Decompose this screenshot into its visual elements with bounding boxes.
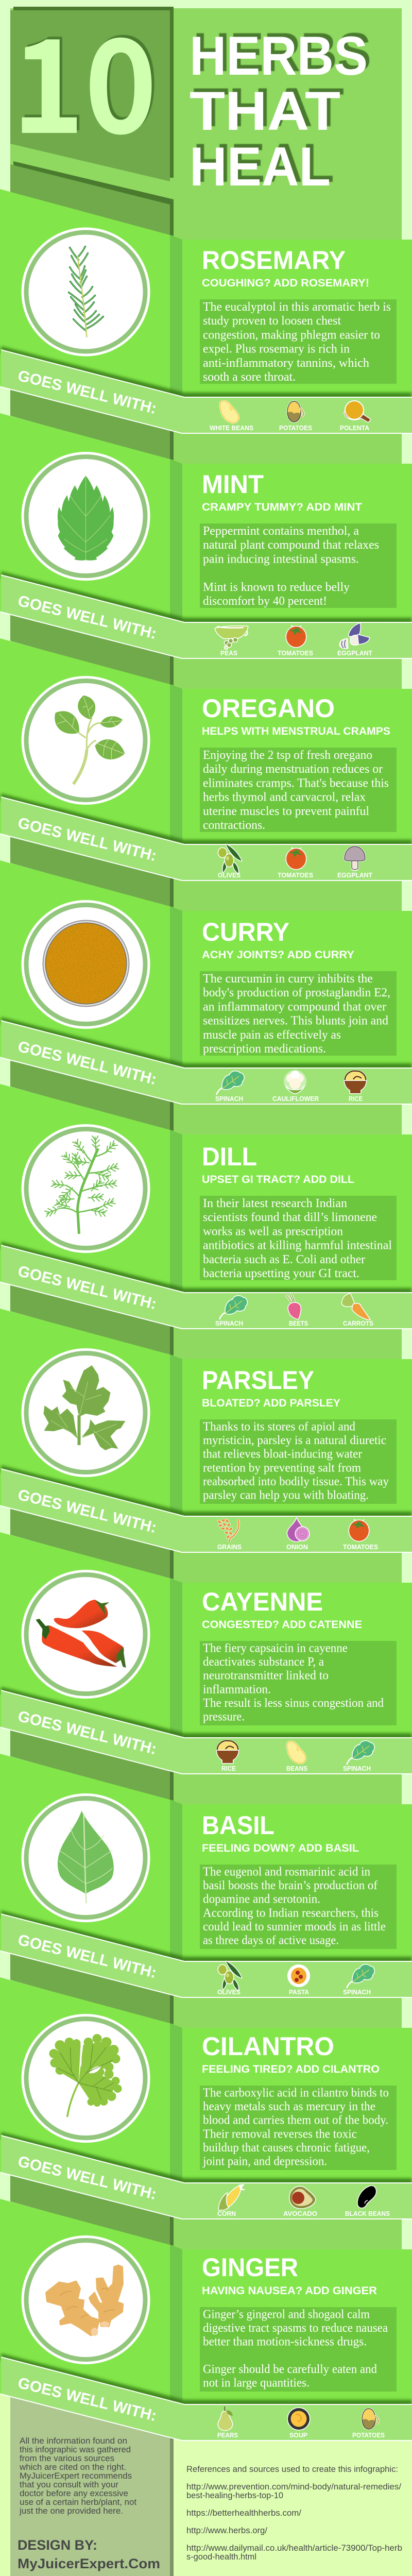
- text block: The curcumin in curry inhibits the: [203, 972, 373, 986]
- panel: cilantro: [0, 1977, 412, 2249]
- food: eggplant: [337, 623, 372, 657]
- food: spinach: SPINACH: [343, 1988, 371, 1996]
- text block: discomfort by 40 percent!: [203, 595, 327, 608]
- text block: not in large quantities.: [203, 2376, 310, 2389]
- food: rice: RICE: [221, 1765, 236, 1772]
- food: carrots: [342, 1294, 373, 1327]
- heading: curry: CURRY: [202, 918, 289, 946]
- text block: study proven to loosen chest: [203, 314, 341, 328]
- text block: parsley can help you with bloating.: [203, 1489, 369, 1502]
- food: spinach: SPINACH: [215, 1095, 243, 1103]
- text block: Enjoying the 2 tsp of fresh oregano: [203, 749, 372, 762]
- ribbon label: GOES WELL WITH:: [16, 592, 158, 642]
- ribbon: [1, 346, 412, 433]
- food: tomatoes: [278, 848, 313, 879]
- text block: Peppermint contains menthol, a: [203, 524, 359, 538]
- food: olives: [218, 844, 242, 879]
- text block: as three days of active usage.: [203, 1934, 339, 1947]
- references: http://www.prevention.com/mind-body/natural-remedies/: [186, 2482, 401, 2492]
- text block: contractions.: [203, 819, 265, 832]
- food: avocado: AVOCADO: [283, 2210, 317, 2217]
- ribbon label: GOES WELL WITH:: [16, 2153, 158, 2203]
- disclaimer text: All the information found on: [20, 2436, 127, 2446]
- disclaimer text: just the one provided here.: [19, 2506, 123, 2516]
- subheading: FEELING TIRED? ADD CILANTRO: [202, 2063, 380, 2075]
- text block: bacteria such as E. Coli and other: [203, 1253, 365, 1266]
- heading: basil: BASIL: [202, 1811, 274, 1840]
- text block: that relieves bloat-inducing water: [203, 1448, 362, 1461]
- text block: [200, 748, 397, 832]
- panel: basil: [0, 1754, 412, 2028]
- ribbon: [1, 793, 412, 880]
- food: avocado: [283, 2187, 317, 2217]
- text block: According to Indian researchers, this: [203, 1906, 379, 1920]
- text block: [200, 1196, 397, 1280]
- food: spinach: [343, 1965, 374, 1996]
- references: http://www.herbs.org/: [186, 2526, 267, 2535]
- circle illustration: mint: [22, 452, 150, 581]
- disclaimer text: that you consult with your: [20, 2480, 118, 2489]
- ribbon label: GOES WELL WITH:: [16, 1263, 158, 1313]
- title: herbs that heal: HERBS: [190, 25, 368, 87]
- disclaimer text: which are cited on the right.: [19, 2462, 126, 2472]
- food: polenta: POLENTA: [340, 424, 370, 432]
- food: eggplant: EGGPLANT: [337, 649, 372, 657]
- references: best-healing-herbs-top-10: [186, 2490, 283, 2500]
- circle illustration: parsley: [22, 1348, 150, 1477]
- ribbon label: GOES WELL WITH:: [16, 1931, 158, 1981]
- design credit: MyJuicerExpert.Com: [18, 2556, 160, 2571]
- text block: The fiery capsaicin in cayenne: [203, 1641, 348, 1655]
- food: black beans: [345, 2186, 390, 2217]
- text block: could lead to sunnier moods in as little: [203, 1920, 386, 1934]
- food: rice: [345, 1071, 366, 1103]
- food: spinach: SPINACH: [343, 1765, 371, 1772]
- food: grains: GRAINS: [217, 1543, 242, 1551]
- text block: buildup that causes chronic fatigue,: [203, 2141, 370, 2155]
- food: beans: BEANS: [286, 1765, 307, 1772]
- text block: pain inducing intestinal spasms.: [203, 552, 359, 566]
- heading: rosemary: ROSEMARY: [202, 246, 346, 275]
- disclaimer text: doctor before any excessive: [20, 2488, 128, 2498]
- disclaimer text: this infographic was gathered: [20, 2445, 131, 2454]
- text block: [200, 1641, 397, 1725]
- title: herbs that heal: HERBS: [193, 21, 371, 83]
- subheading: HAVING NAUSEA? ADD GINGER: [202, 2285, 377, 2297]
- references: [186, 2464, 402, 2562]
- text block: neurotransmitter linked to: [203, 1669, 329, 1683]
- references: s-good-health.html: [186, 2552, 256, 2562]
- text block: scientists found that dill’s limonene: [203, 1211, 377, 1224]
- subheading: CONGESTED? ADD CATENNE: [202, 1619, 362, 1631]
- food: black beans: BLACK BEANS: [345, 2210, 390, 2217]
- food: spinach: [343, 1741, 374, 1772]
- ribbon label: GOES WELL WITH:: [16, 815, 158, 865]
- food: olives: OLIVES: [218, 871, 241, 879]
- food: pears: [217, 2406, 238, 2439]
- text block: myristicin, parsley is a natural diuretic: [203, 1434, 386, 1447]
- heading: ginger: GINGER: [202, 2253, 298, 2282]
- food: grains: [217, 1518, 242, 1551]
- circle illustration: curry: [22, 900, 150, 1029]
- text block: antibiotics at killing harmful intestinal: [203, 1239, 392, 1252]
- subheading: HELPS WITH MENSTRUAL CRAMPS: [202, 725, 390, 737]
- text block: [200, 2086, 397, 2170]
- design credit: DESIGN BY:: [18, 2537, 97, 2553]
- circle illustration: basil: [22, 1793, 150, 1922]
- panel: cayenne: [0, 1532, 412, 1804]
- food: pasta: [287, 1964, 310, 1996]
- text block: eliminates cramps. That's because this: [203, 776, 389, 790]
- panel: rosemary: [0, 189, 412, 464]
- heading: oregano: OREGANO: [202, 694, 335, 723]
- food: spinach: [215, 1296, 247, 1327]
- food: olives: [217, 1961, 242, 1996]
- references: http://www.dailymail.co.uk/health/article-73900/Top-herb: [186, 2543, 402, 2553]
- text block: Ginger should be carefully eaten and: [203, 2363, 377, 2376]
- food: spinach: [215, 1072, 244, 1103]
- heading: dill: DILL: [202, 1142, 257, 1171]
- title: herbs that heal: HEAL: [193, 132, 334, 194]
- text block: [200, 1419, 397, 1504]
- food: beets: [286, 1294, 308, 1327]
- text block: Ginger’s gingerol and shogaol calm: [203, 2308, 370, 2321]
- subheading: BLOATED? ADD PARSLEY: [202, 1397, 340, 1409]
- heading: cilantro: CILANTRO: [202, 2032, 334, 2061]
- title: herbs that heal: THAT: [193, 76, 344, 138]
- design credit: [18, 2537, 160, 2571]
- ribbon label: GOES WELL WITH:: [16, 1038, 158, 1088]
- text block: [200, 299, 397, 384]
- heading: mint: MINT: [202, 470, 264, 499]
- subheading: COUGHING? ADD ROSEMARY!: [202, 277, 369, 289]
- ribbon: [1, 2353, 412, 2441]
- food: onion: ONION: [286, 1543, 308, 1551]
- text block: bacteria upsetting your GI tract.: [203, 1267, 359, 1280]
- panel: parsley: [0, 1309, 412, 1583]
- text block: [200, 523, 397, 608]
- food: tomatoes: [278, 625, 313, 657]
- ribbon label: GOES WELL WITH:: [16, 367, 158, 417]
- title: herbs that heal: [190, 21, 371, 197]
- food: tomatoes: TOMATOES: [343, 1543, 378, 1551]
- text block: expel. Plus rosemary is rich in: [203, 343, 350, 356]
- food: cauliflower: [272, 1070, 319, 1103]
- food: beets: BEETS: [289, 1319, 308, 1327]
- text block: dopamine and serotonin.: [203, 1893, 320, 1906]
- text block: The carboxylic acid in cilantro binds to: [203, 2087, 389, 2100]
- text block: The eugenol and rosmarinic acid in: [203, 1865, 370, 1878]
- ribbon: [1, 2132, 412, 2219]
- food: peas: PEAS: [220, 649, 237, 657]
- text block: [200, 971, 397, 1056]
- food: soup: [288, 2408, 310, 2439]
- ribbon: [1, 1465, 412, 1552]
- subheading: CRAMPY TUMMY? ADD MINT: [202, 501, 362, 513]
- text block: sensitizes nerves. This blunts join and: [203, 1014, 388, 1028]
- food: corn: CORN: [217, 2210, 236, 2217]
- circle illustration: oregano: [22, 676, 150, 805]
- panel: mint: [0, 413, 412, 689]
- subheading: UPSET GI TRACT? ADD DILL: [202, 1174, 354, 1185]
- text block: reabsorbed into bodily tissue. This way: [203, 1475, 389, 1488]
- food: tomatoes: [343, 1519, 378, 1551]
- circle illustration: dill: [22, 1124, 150, 1253]
- food: tomatoes: TOMATOES: [278, 649, 313, 657]
- text block: pressure.: [203, 1710, 245, 1724]
- ribbon: [1, 1017, 412, 1104]
- heading: parsley: PARSLEY: [202, 1366, 314, 1395]
- text block: anti-inflammatory tannins, which: [203, 357, 369, 370]
- text block: The result is less sinus congestion and: [203, 1697, 384, 1710]
- heading: cayenne: CAYENNE: [202, 1587, 323, 1616]
- ribbon label: GOES WELL WITH:: [16, 1486, 158, 1536]
- text block: [200, 1865, 397, 1949]
- text block: digestive tract spasms to reduce nausea: [203, 2321, 388, 2335]
- header panel: [10, 0, 402, 240]
- text block: basil boosts the brain’s production of: [203, 1879, 377, 1892]
- text block: muscle pain as effectively as: [203, 1028, 341, 1042]
- food: potatoes: [279, 401, 312, 432]
- food: peas: [215, 626, 248, 657]
- panel: oregano: [0, 638, 412, 911]
- text block: Mint is known to reduce belly: [203, 581, 350, 594]
- food: eggplant (mushroom icon): [337, 846, 372, 879]
- panel: ginger: [0, 2199, 412, 2441]
- food: beans: [286, 1741, 307, 1772]
- circle illustration: cilantro: [22, 2014, 150, 2143]
- references: https://betterhealthherbs.com/: [186, 2508, 301, 2518]
- food: olives: OLIVES: [217, 1988, 241, 1996]
- ribbon label: GOES WELL WITH:: [16, 1708, 158, 1758]
- disclaimer text: use of a certain herb/plant, not: [20, 2497, 136, 2507]
- text block: body's production of prostaglandin E2,: [203, 986, 390, 999]
- disclaimer text: [19, 2436, 136, 2516]
- text block: blood and carries them out of the body.: [203, 2114, 388, 2127]
- text block: deactivates substance P, a: [203, 1655, 324, 1669]
- food: white beans: WHITE BEANS: [210, 424, 253, 432]
- text block: an inflammatory compound that over: [203, 1000, 386, 1013]
- disclaimer text: from the various sources: [20, 2453, 114, 2463]
- food: corn: [217, 2184, 246, 2217]
- text block: [200, 2307, 397, 2392]
- food: tomatoes: TOMATOES: [278, 871, 313, 879]
- text block: prescription medications.: [203, 1042, 326, 1056]
- text block: herbs thymol and carvacrol, relax: [203, 791, 366, 804]
- food: pasta: PASTA: [289, 1988, 310, 1996]
- text block: joint pain, and depression.: [202, 2155, 327, 2168]
- food: potatoes: [352, 2409, 385, 2439]
- food: spinach: SPINACH: [215, 1319, 243, 1327]
- title: herbs that heal: HEAL: [190, 135, 331, 197]
- circle illustration: rosemary: [22, 228, 150, 357]
- text block: better than motion-sickness drugs.: [203, 2335, 367, 2349]
- text block: Their removal reverses the toxic: [203, 2127, 357, 2141]
- ribbon: [1, 1687, 412, 1774]
- panel: curry: [0, 860, 412, 1134]
- subheading: FEELING DOWN? ADD BASIL: [202, 1842, 359, 1854]
- subheading: ACHY JOINTS? ADD CURRY: [202, 949, 354, 961]
- text block: In their latest research Indian: [203, 1197, 347, 1210]
- text block: congestion, making phlegm easier to: [203, 328, 380, 342]
- circle illustration: ginger: [22, 2235, 150, 2364]
- text block: Thanks to its stores of apiol and: [203, 1420, 355, 1433]
- ribbon: [1, 1910, 412, 1997]
- ribbon: [1, 1242, 412, 1329]
- food: white beans: [210, 401, 253, 432]
- food: potatoes: POTATOES: [352, 2431, 385, 2439]
- food: carrots: CARROTS: [343, 1319, 373, 1327]
- title: herbs that heal: THAT: [190, 80, 340, 142]
- circle illustration: cayenne: [22, 1570, 150, 1699]
- ribbon: [1, 571, 412, 658]
- text block: works as well as prescription: [203, 1225, 343, 1238]
- text block: heavy metals such as mercury in the: [203, 2100, 375, 2113]
- food: rice: [217, 1741, 238, 1772]
- panel: dill: [0, 1084, 412, 1359]
- text block: sooth a sore throat.: [203, 370, 296, 384]
- food: pears: PEARS: [217, 2431, 238, 2439]
- food: polenta: [340, 401, 370, 432]
- food: onion: [286, 1518, 309, 1551]
- text block: uterine muscles to prevent painful: [203, 805, 369, 818]
- food: eggplant (mushroom icon): EGGPLANT: [337, 871, 372, 879]
- text block: natural plant compound that relaxes: [203, 538, 379, 552]
- text block: The eucalyptol in this aromatic herb is: [203, 300, 391, 314]
- food: potatoes: POTATOES: [279, 424, 312, 432]
- food: rice: RICE: [349, 1095, 363, 1103]
- footer background: [0, 2391, 412, 2576]
- food: cauliflower: CAULIFLOWER: [272, 1095, 319, 1103]
- disclaimer text: MyJuicerExpert recommends: [20, 2471, 132, 2481]
- text block: daily during menstruation reduces or: [203, 762, 383, 776]
- references: References and sources used to create this infographic:: [186, 2464, 398, 2474]
- text block: retention by preventing salt from: [203, 1461, 361, 1475]
- text block: inflammation.: [203, 1683, 271, 1696]
- food: soup: SOUP: [289, 2431, 307, 2439]
- ribbon label: GOES WELL WITH:: [16, 2375, 158, 2425]
